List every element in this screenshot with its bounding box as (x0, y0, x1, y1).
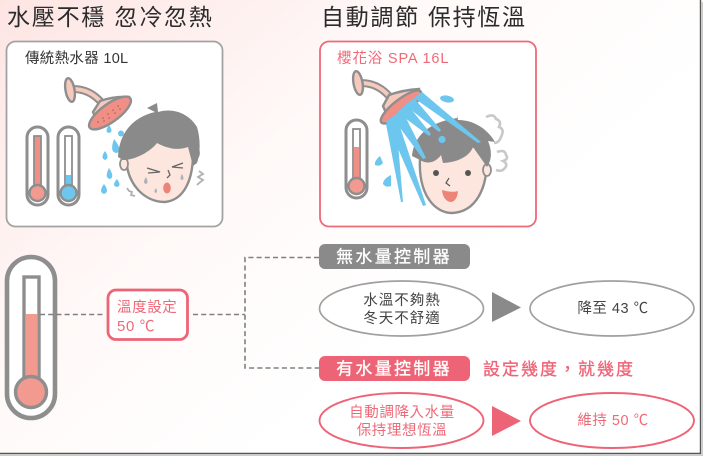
ellipse: auto adjust (320, 393, 484, 448)
icon: shower head (351, 70, 425, 128)
callout: temperature setting: 溫度設定 (117, 299, 177, 316)
panel: sakura spa (320, 42, 536, 226)
icon: water spray (375, 92, 481, 206)
icon: large thermometer (7, 257, 55, 418)
ellipse: keeps 50 (530, 393, 694, 448)
ellipse: not hot enough: 冬天不舒適 (363, 309, 441, 327)
panel label: traditional: 傳統熱水器 10L (25, 50, 128, 67)
heading: left: 水壓不穩 忽冷忽熱 (7, 4, 214, 30)
badge: no flow controller: 無水量控制器 (336, 248, 452, 266)
panel label: sakura: 櫻花浴 SPA 16L (337, 50, 449, 67)
illustration: distressed face (118, 103, 203, 202)
panel: traditional heater (6, 42, 222, 226)
ellipse: not hot enough (320, 281, 484, 336)
ellipse: not hot enough: 水溫不夠熱 (363, 292, 441, 309)
callout: temperature setting: 50 ℃ (117, 318, 155, 335)
icon: shower head (63, 77, 136, 135)
heading: right: 自動調節 保持恆溫 (321, 4, 527, 30)
badge: no flow controller (319, 244, 470, 269)
icon: thermometer (346, 120, 367, 198)
ellipse: keeps 50: 維持 50 ℃ (577, 412, 649, 429)
icon: water drops (101, 125, 124, 194)
illustration: happy face (412, 115, 507, 213)
connector: dashed lines (40, 258, 319, 368)
badge: with flow controller (319, 356, 470, 381)
ellipse: auto adjust: 保持理想恆溫 (357, 422, 447, 439)
ellipse: auto adjust: 自動調降入水量 (349, 404, 455, 421)
callout: temperature setting (108, 290, 188, 340)
badge: with flow controller: 有水量控制器 (336, 360, 452, 378)
tagline: 設定幾度，就幾度 (483, 360, 635, 379)
arrow: red (492, 406, 521, 436)
icon: hot thermometer (27, 127, 48, 205)
arrow: gray (492, 292, 521, 322)
ellipse: drops to 43 (530, 281, 694, 336)
icon: cold thermometer (58, 127, 79, 205)
ellipse: drops to 43: 降至 43 ℃ (577, 300, 649, 317)
